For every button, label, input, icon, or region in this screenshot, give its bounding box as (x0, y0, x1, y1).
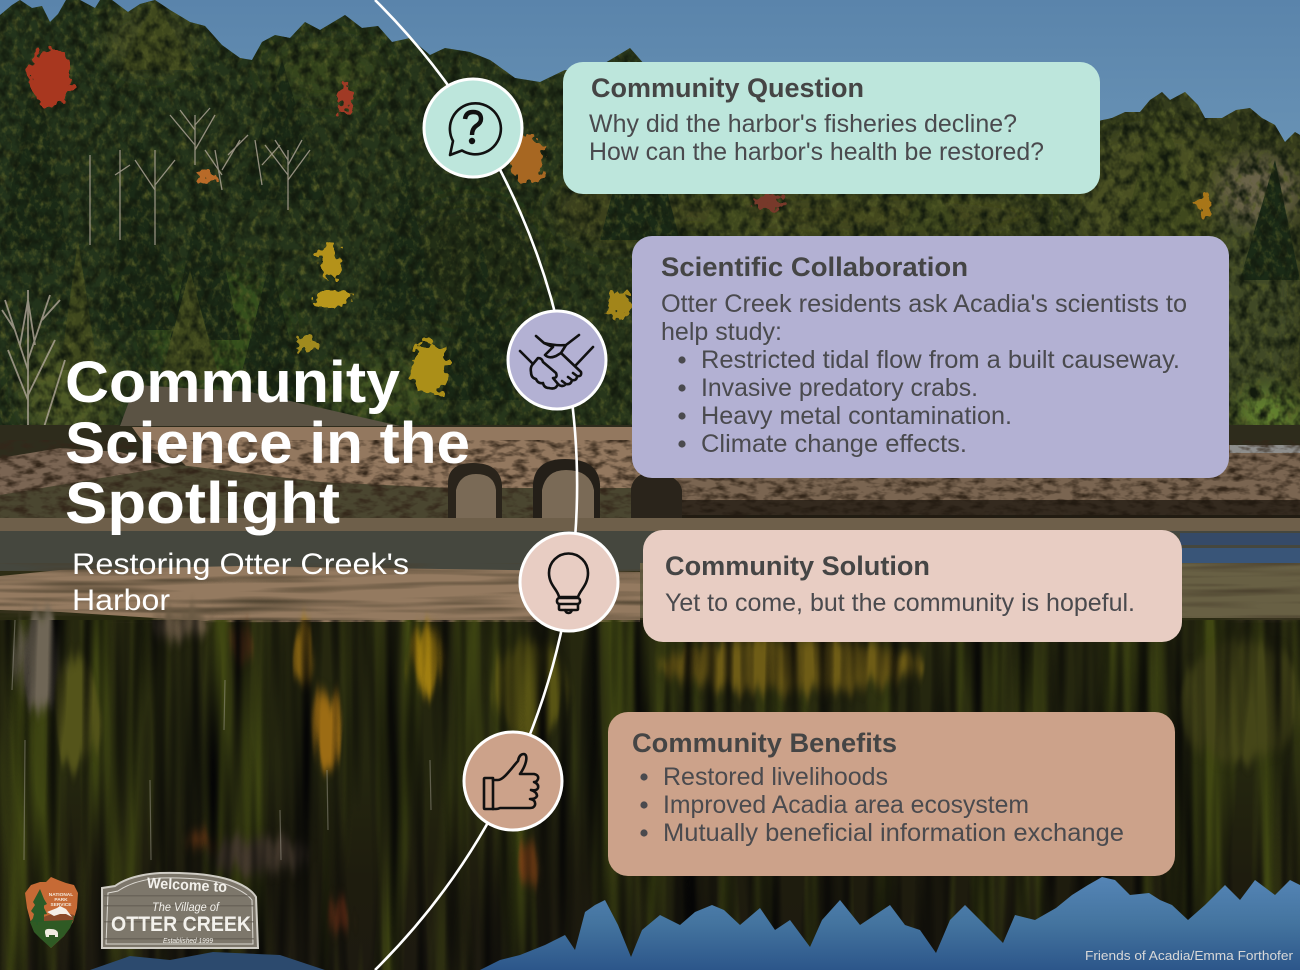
panel: scientific collaboration: Heavy metal contamination. (701, 402, 1012, 430)
panel: community benefits: Community Benefits (632, 728, 897, 758)
panel: community solution: Yet to come, but the community is hopeful. (665, 589, 1135, 617)
logo: National Park Service arrowhead: PARK (54, 897, 68, 903)
panel: community benefits: Improved Acadia area ecosystem (663, 791, 1029, 819)
panel: community question: Why did the harbor's fisheries decline? (589, 110, 1017, 138)
panel: scientific collaboration: help study: (661, 318, 782, 346)
subtitle: Harbor (72, 584, 170, 617)
title (65, 350, 470, 536)
panel: community benefits (608, 712, 1175, 876)
logo: National Park Service arrowhead (25, 877, 78, 948)
logo: Village of Otter Creek welcome sign: Welcome to (147, 875, 227, 896)
panel: scientific collaboration: Otter Creek residents ask Acadia's scientists to (661, 290, 1187, 318)
panel: scientific collaboration: Restricted tidal flow from a built causeway. (701, 346, 1180, 374)
panel: scientific collaboration: Climate change effects. (701, 430, 967, 458)
logo: National Park Service arrowhead: NATIONAL (49, 892, 73, 898)
logo: Village of Otter Creek welcome sign: OTTER CREEK (111, 913, 251, 936)
title: Community (65, 350, 400, 415)
panel: community benefits: Restored livelihoods (663, 763, 888, 791)
icon: question speech bubble (424, 79, 522, 177)
logo: National Park Service arrowhead: SERVICE (51, 902, 72, 908)
panel: community benefits: Mutually beneficial information exchange (663, 819, 1124, 847)
subtitle (72, 548, 409, 617)
panel: scientific collaboration (632, 236, 1229, 478)
panel: scientific collaboration: Scientific Collaboration (661, 252, 968, 282)
panel: community question: Community Question (591, 73, 864, 103)
title: Science in the (65, 411, 470, 476)
icon: thumbs up (464, 732, 562, 830)
logo: Village of Otter Creek welcome sign: The Village of (152, 900, 221, 914)
panel: community question: How can the harbor's health be restored? (589, 138, 1044, 166)
title: Spotlight (65, 471, 340, 536)
icon: handshake (508, 311, 606, 409)
timeline curve (375, 0, 577, 970)
panel: community question (563, 62, 1100, 194)
shore band (0, 425, 1300, 525)
panel: community solution: Community Solution (665, 551, 930, 581)
photo credit: Friends of Acadia/Emma Forthofer (1085, 948, 1294, 963)
logo: Village of Otter Creek welcome sign: Established 1999 (163, 938, 213, 945)
panel: community solution (643, 530, 1182, 642)
panel: scientific collaboration: Invasive predatory crabs. (701, 374, 978, 402)
logo: Village of Otter Creek welcome sign (102, 873, 258, 948)
icon: light bulb (520, 533, 618, 631)
water (0, 518, 1300, 970)
subtitle: Restoring Otter Creek's (72, 548, 409, 581)
